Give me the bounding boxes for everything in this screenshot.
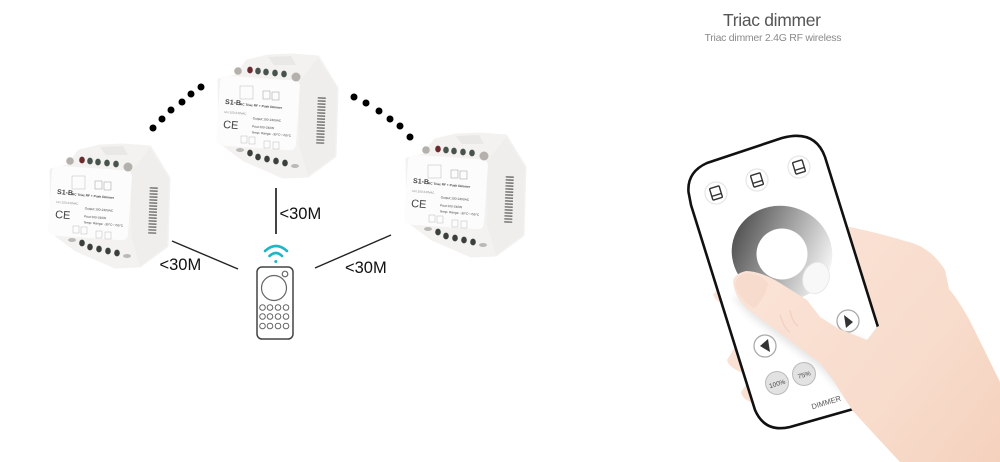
dimmer module: left: Uin:100-240VAC <box>56 200 79 206</box>
dimmer module: left <box>48 145 169 267</box>
dimmer module: left: CE <box>55 209 71 222</box>
large remote control <box>688 136 885 428</box>
range line: middle module to remote <box>275 188 277 234</box>
preset percent buttons: 75% <box>797 370 812 381</box>
dimmer module: left: Temp. Range: -30°C~+55°C <box>83 220 124 228</box>
dotted link: left to middle module <box>150 84 204 132</box>
dotted link: middle to right module <box>350 94 414 140</box>
thumb crease <box>780 310 798 332</box>
dimmer module: right: CE <box>411 198 427 211</box>
fingers and palm behind remote <box>713 225 960 404</box>
dimmer module: right: AC Triac RF + Push Dimmer <box>428 181 471 189</box>
dimmer module: right: Output:100-240VAC <box>441 195 470 202</box>
icon: small remote <box>257 267 293 339</box>
dimmer module: right: Temp. Range: -30°C~+55°C <box>439 209 480 217</box>
thumb shadow <box>733 290 872 400</box>
dimmer module: middle: Temp. Range: -30°C~+55°C <box>251 130 292 138</box>
dimmer module: middle: Pout:100-240W <box>252 124 274 130</box>
dimmer module: middle: AC Triac RF + Push Dimmer <box>240 102 283 110</box>
dimmer module: left: Pout:100-240W <box>84 214 106 220</box>
dimmer module: left: AC Triac RF + Push Dimmer <box>72 192 115 200</box>
dimmer module: left: Output:100-240VAC <box>85 206 114 213</box>
touch colour wheel <box>721 195 843 311</box>
preset percent buttons <box>766 362 816 394</box>
dimmer module: right: Pout:100-240W <box>440 203 462 209</box>
subtitle: Triac dimmer 2.4G RF wireless <box>704 32 842 44</box>
dimmer module: right: S1-B <box>413 178 429 186</box>
thumb and lower hand <box>733 271 1000 462</box>
dimmer module: middle: CE <box>223 119 239 132</box>
icon: preset buttons <box>705 156 810 204</box>
arrow buttons <box>754 310 859 357</box>
dimmer module: right: Uin:100-240VAC <box>412 189 435 195</box>
dimmer module: middle: Uin:100-240VAC <box>224 110 247 116</box>
thumbnail shading <box>735 273 768 308</box>
range line: right module to remote <box>315 235 391 268</box>
dimmer module: middle: S1-B <box>225 99 241 107</box>
range label: middle: <30M <box>280 205 321 223</box>
dimmer module: left: S1-B <box>57 189 73 197</box>
range label: left: <30M <box>160 256 201 274</box>
title: Triac dimmer <box>723 10 821 30</box>
icon: wifi signal <box>265 246 287 263</box>
range line: left module to remote <box>172 241 238 269</box>
range label: right: <30M <box>345 259 387 277</box>
dimmer module: middle: Output:100-240VAC <box>253 116 282 123</box>
dimmer module: right <box>404 134 525 256</box>
preset percent buttons: 100% <box>768 379 787 390</box>
dimmer module: middle <box>216 55 337 177</box>
remote label: DIMMER <box>810 394 843 411</box>
